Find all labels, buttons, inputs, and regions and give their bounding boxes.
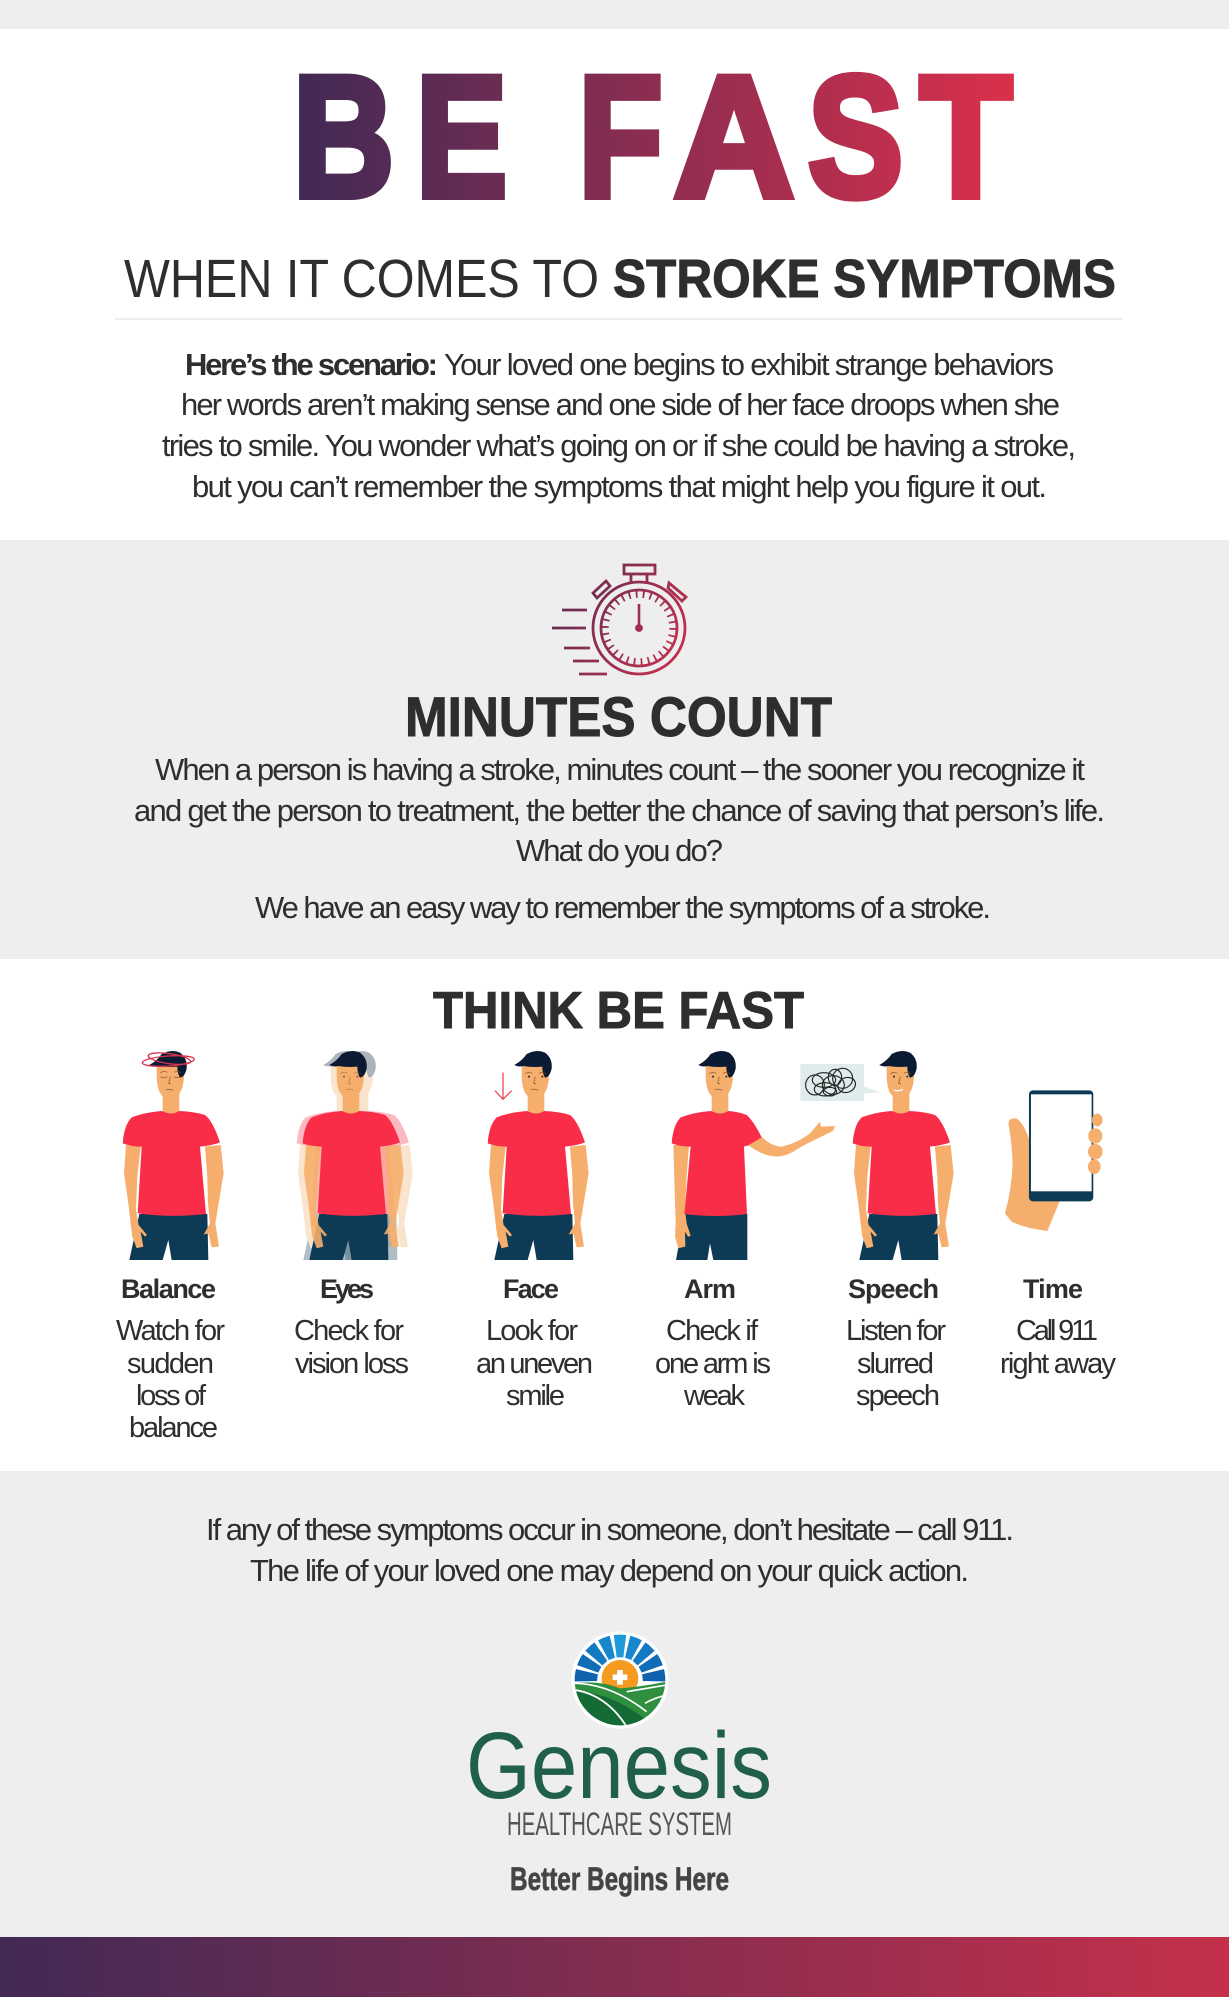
illustration: eyes — [297, 1051, 413, 1260]
label: time: Call 911 — [1016, 1315, 1098, 1347]
label: balance — [116, 1274, 225, 1444]
title: S — [808, 41, 903, 233]
icon: stopwatch — [552, 565, 686, 674]
logo: wordmark: HEALTHCARE SYSTEM — [507, 1806, 732, 1842]
subtitle: WHEN IT COMES TO — [124, 249, 599, 309]
text block: call 911 — [206, 1512, 1014, 1588]
text block: minutes explanation: We have an easy way to remember the symptoms of a stroke. — [255, 890, 991, 925]
illustration: face — [488, 1051, 589, 1260]
label: speech: Speech — [848, 1274, 939, 1304]
illustration: speech — [800, 1051, 954, 1260]
text block: scenario: Your loved one begins to exhibit strange behaviors — [444, 347, 1054, 382]
illustration: arm — [672, 1051, 835, 1260]
panel: top band — [0, 0, 1229, 29]
label: balance: sudden — [127, 1348, 214, 1380]
title: E — [416, 41, 507, 233]
label: balance: balance — [129, 1412, 218, 1444]
illustration: balance — [123, 1051, 224, 1260]
label: arm: weak — [683, 1380, 746, 1412]
label: speech: slurred — [857, 1348, 934, 1380]
text block: scenario — [162, 347, 1076, 504]
label: speech: speech — [856, 1380, 940, 1412]
text block: scenario: her words aren’t making sense and one side of her face droops when she — [181, 387, 1060, 422]
label: arm: one arm is — [655, 1348, 771, 1380]
text block: scenario: tries to smile. You wonder what’s going on or if she could be having a stroke, — [162, 428, 1076, 463]
label: balance: loss of — [136, 1380, 207, 1412]
text block: call 911: If any of these symptoms occur in someone, don’t hesitate – call 911. — [206, 1512, 1014, 1547]
label: arm: Arm — [684, 1274, 736, 1304]
label: arm: Check if — [666, 1315, 759, 1347]
text block: minutes explanation: What do you do? — [516, 833, 723, 868]
heading: minutes count: MINUTES COUNT — [405, 685, 832, 748]
icon: speech bubble — [800, 1064, 881, 1101]
label: eyes: Check for — [294, 1315, 404, 1347]
label: face — [476, 1274, 593, 1412]
illustration: phone in hand — [1005, 1090, 1103, 1231]
label: eyes: vision loss — [295, 1348, 409, 1380]
logo: wordmark: Genesis — [466, 1713, 772, 1819]
heading: think be fast: THINK BE FAST — [433, 982, 804, 1040]
text block: scenario: Here’s the scenario: — [185, 347, 438, 382]
text block: minutes explanation: and get the person to treatment, the better the chance of saving that person’s life. — [134, 793, 1105, 828]
logo: wordmark — [466, 1713, 772, 1897]
footer gradient bar — [0, 1937, 1229, 1997]
title: A — [674, 41, 794, 233]
label: face: an uneven — [476, 1348, 593, 1380]
title: T — [920, 41, 1012, 233]
label: eyes: Eyes — [320, 1274, 374, 1304]
label: arm — [655, 1274, 771, 1412]
label: balance: Balance — [121, 1274, 216, 1304]
panel: think be fast — [0, 959, 1229, 1471]
label: face: Face — [503, 1274, 559, 1304]
label: balance: Watch for — [116, 1315, 225, 1347]
text block: minutes explanation — [134, 752, 1105, 925]
text block: scenario: but you can’t remember the symptoms that might help you figure it out. — [192, 469, 1047, 504]
label: speech — [846, 1274, 946, 1412]
title — [293, 41, 1012, 233]
text block: call 911: The life of your loved one may depend on your quick action. — [250, 1553, 969, 1588]
logo: wordmark: Better Begins Here — [510, 1861, 729, 1897]
panel: header — [0, 29, 1229, 540]
label: speech: Listen for — [846, 1315, 946, 1347]
label: face: smile — [506, 1380, 565, 1412]
title: B — [293, 41, 394, 233]
panel: call to action — [0, 1471, 1229, 1938]
label: time: Time — [1023, 1274, 1083, 1304]
label: time: right away — [1000, 1348, 1116, 1380]
label: time — [1000, 1274, 1116, 1380]
text block: minutes explanation: When a person is having a stroke, minutes count – the sooner you recognize it — [155, 752, 1085, 787]
panel: minutes count — [0, 540, 1229, 959]
subtitle — [124, 249, 1116, 309]
label: face: Look for — [486, 1315, 578, 1347]
title: F — [578, 41, 662, 233]
logo: Genesis emblem — [571, 1631, 669, 1730]
label: eyes — [294, 1274, 409, 1380]
subtitle: STROKE SYMPTOMS — [613, 249, 1116, 309]
